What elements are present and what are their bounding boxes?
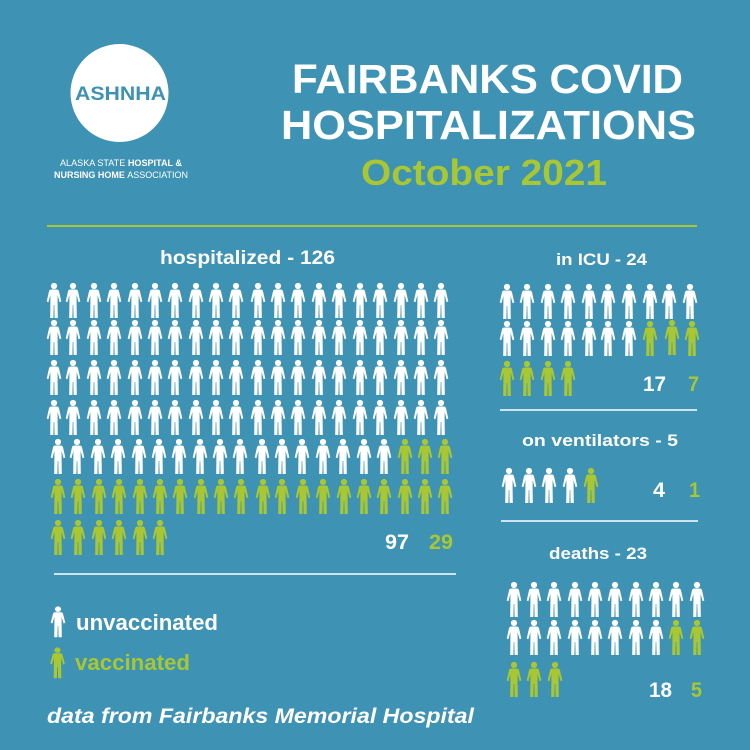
heading: on ventilators: on ventilators - 5 (522, 431, 678, 450)
heading: hospitalized: hospitalized - 126 (160, 248, 335, 269)
pictogram: hospitalized row 6 vaccinated (51, 479, 452, 514)
pictogram: hospitalized row 4 (47, 400, 448, 435)
title line 2: HOSPITALIZATIONS (281, 102, 696, 148)
pictogram: hospitalized row 2 (47, 320, 448, 355)
panel: on ventilators (502, 431, 700, 503)
pictogram: ICU vaccinated (500, 320, 699, 396)
logo (54, 44, 188, 181)
count: hospitalized unvaccinated: 97 (385, 531, 409, 554)
heading: in ICU: in ICU - 24 (556, 250, 648, 269)
title (281, 56, 696, 193)
pictogram: ventilators unvaccinated (502, 468, 577, 503)
logo circle (70, 44, 168, 142)
pictogram: hospitalized row 1 (47, 283, 448, 318)
count: ventilators unvaccinated: 4 (653, 479, 665, 502)
count: ICU unvaccinated: 17 (643, 373, 666, 396)
panel: deaths (507, 544, 704, 702)
pictogram: hospitalized row 5 vaccinated (398, 439, 452, 474)
pictogram: deaths vaccinated (507, 620, 704, 697)
logo tagline line 1: ALASKA STATE HOSPITAL & (60, 158, 182, 169)
panel: hospitalized (47, 248, 453, 555)
source note: data from Fairbanks Memorial Hospital (47, 705, 475, 728)
count: deaths vaccinated: 5 (691, 679, 702, 702)
legend label: vaccinated: vaccinated (75, 650, 190, 675)
heading: deaths: deaths - 23 (549, 544, 647, 563)
subtitle date: October 2021 (361, 152, 607, 193)
panel: in ICU (500, 250, 699, 396)
pictogram: hospitalized row 5 unvaccinated (51, 439, 391, 474)
count: ventilators vaccinated: 1 (689, 479, 700, 502)
title line 1: FAIRBANKS COVID (292, 56, 683, 102)
legend (50, 606, 218, 678)
pictogram: hospitalized row 7 vaccinated (51, 520, 167, 555)
pictogram: hospitalized row 3 (47, 360, 448, 395)
count: ICU vaccinated: 7 (688, 373, 699, 396)
logo tagline line 2: NURSING HOME ASSOCIATION (54, 170, 188, 181)
count: hospitalized vaccinated: 29 (429, 531, 453, 554)
logo wordmark: ASHNHA (75, 84, 166, 105)
icon: vaccinated person (50, 647, 65, 678)
legend label: unvaccinated: unvaccinated (76, 610, 218, 635)
pictogram: ICU unvaccinated (500, 284, 697, 356)
count: deaths unvaccinated: 18 (649, 679, 672, 702)
icon: unvaccinated person (51, 606, 65, 637)
pictogram: ventilators vaccinated (584, 468, 598, 503)
pictogram: deaths unvaccinated (507, 582, 704, 655)
